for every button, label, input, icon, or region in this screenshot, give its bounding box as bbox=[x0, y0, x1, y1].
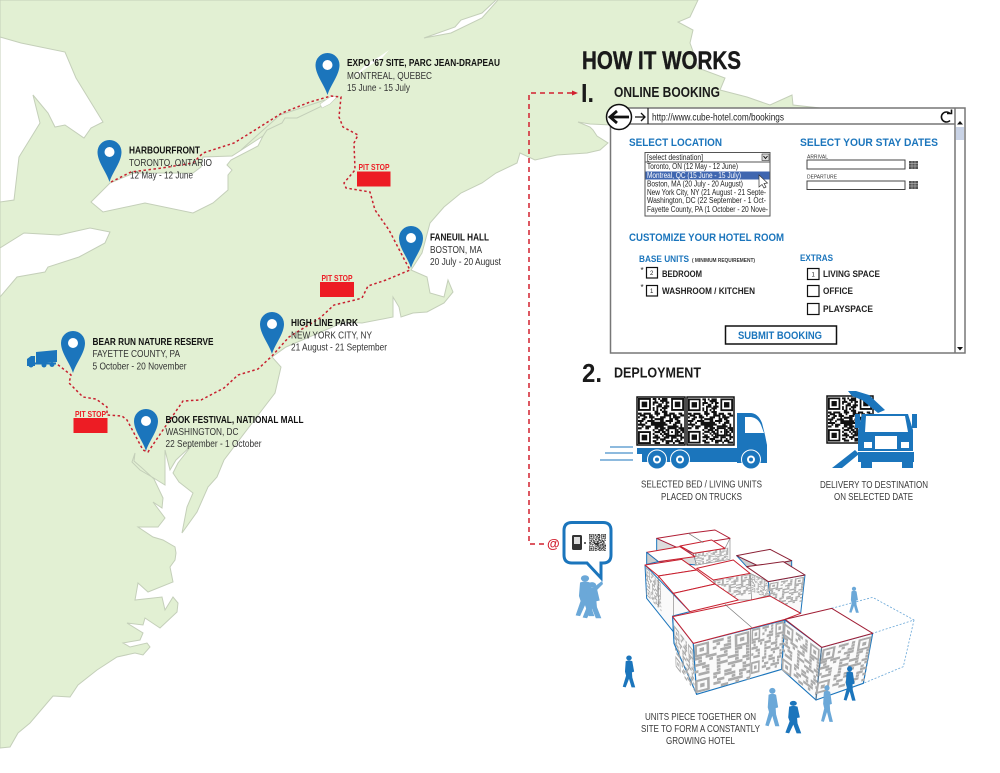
pit stop: north bbox=[357, 162, 390, 186]
speech bubble: phone and QR scan bbox=[564, 522, 611, 578]
dropdown list bbox=[645, 152, 770, 216]
pin: Book Festival bbox=[134, 409, 158, 451]
people around building bbox=[623, 587, 859, 733]
scrollbar bbox=[956, 121, 964, 350]
people scanning bbox=[576, 575, 603, 618]
label: High Line Park: HIGH LINE PARK bbox=[291, 317, 358, 329]
label: Faneuil Hall bbox=[430, 232, 501, 268]
base units options: WASHROOM / KITCHEN bbox=[662, 286, 755, 297]
middle units bbox=[697, 560, 807, 613]
heading: online booking: ONLINE BOOKING bbox=[614, 84, 720, 101]
base units options: 2 bbox=[650, 271, 654, 277]
pit stop: south: PIT STOP bbox=[75, 409, 106, 419]
caption: trucks bbox=[641, 480, 762, 503]
label: High Line Park bbox=[291, 317, 387, 354]
dropdown list: Toronto, ON (12 May - 12 June) bbox=[647, 162, 738, 171]
dropdown list: Montreal, QC (15 June - 15 July) bbox=[647, 171, 741, 180]
caption: units piece together bbox=[641, 712, 760, 747]
pin: Harbourfront bbox=[98, 140, 122, 182]
label: Bear Run: BEAR RUN NATURE RESERVE bbox=[92, 336, 214, 348]
caption: delivery: DELIVERY TO DESTINATION bbox=[820, 480, 928, 491]
pit stop: middle bbox=[320, 273, 354, 297]
dotted tour route bbox=[57, 96, 410, 452]
heading: select your stay dates: SELECT YOUR STAY DATES bbox=[800, 137, 938, 149]
extras options: LIVING SPACE bbox=[823, 269, 880, 280]
caption: units piece together: UNITS PIECE TOGETHER ON bbox=[645, 712, 756, 723]
icon: front view truck unloading QR unit bbox=[827, 391, 917, 468]
label: Faneuil Hall: 20 July - 20 August bbox=[430, 256, 501, 268]
map: northern river bbox=[424, 0, 498, 38]
base units options: * bbox=[640, 266, 644, 275]
base units options bbox=[639, 254, 755, 297]
map: St Lawrence river bbox=[241, 96, 338, 150]
submit button: SUBMIT BOOKING bbox=[738, 330, 822, 342]
label: Book Festival: WASHINGTON, DC bbox=[166, 426, 239, 438]
base units options: BASE UNITS bbox=[639, 254, 689, 265]
dropdown list: [select destination] bbox=[647, 153, 703, 162]
extras options: 1 bbox=[812, 272, 816, 278]
arrival and departure fields bbox=[807, 154, 918, 190]
extras options bbox=[800, 253, 880, 315]
pin: Bear Run bbox=[61, 331, 85, 373]
map: land mass bbox=[0, 0, 820, 748]
map: river sliver bbox=[350, 50, 389, 80]
pit stop: south bbox=[74, 409, 108, 433]
label: Bear Run bbox=[92, 336, 214, 372]
label: Expo 67 bbox=[347, 57, 500, 94]
map: Lake Huron bbox=[0, 37, 103, 202]
caption: trucks: PLACED ON TRUCKS bbox=[661, 492, 742, 503]
caption: units piece together: SITE TO FORM A CONSTANTLY bbox=[641, 724, 760, 735]
map: Lake Ontario bbox=[91, 136, 263, 213]
heading: deployment: DEPLOYMENT bbox=[614, 366, 701, 382]
pit stop: north: PIT STOP bbox=[358, 162, 390, 172]
panel: browser booking window bbox=[606, 104, 965, 353]
heading: customize your hotel room: CUSTOMIZE YOUR HOTEL ROOM bbox=[629, 232, 784, 244]
modular hotel building bbox=[623, 530, 914, 733]
left row of units bbox=[645, 559, 738, 632]
dropdown list: Washington, DC (22 September - 1 Oct- bbox=[647, 196, 766, 205]
icon: back button bbox=[606, 104, 632, 130]
dropdown list: New York City, NY (21 August - 21 Septe- bbox=[647, 188, 766, 197]
base units options: BEDROOM bbox=[662, 269, 702, 280]
dashed link from map to steps bbox=[529, 90, 578, 544]
icon: reload bbox=[941, 110, 952, 122]
icon: small truck bbox=[27, 350, 57, 368]
map: Lake Erie bbox=[0, 228, 110, 297]
dropdown list: Boston, MA (20 July - 20 August) bbox=[647, 180, 743, 188]
arrival and departure fields: ARRIVAL bbox=[807, 154, 828, 160]
extras options: PLAYSPACE bbox=[823, 304, 873, 315]
label: High Line Park: NEW YORK CITY, NY bbox=[291, 330, 372, 342]
icon: forward arrow bbox=[635, 113, 645, 121]
at symbol: @ bbox=[547, 536, 560, 551]
label: Harbourfront: 12 May - 12 June bbox=[130, 170, 193, 182]
label: Harbourfront: TORONTO, ONTARIO bbox=[129, 157, 212, 169]
caption: delivery bbox=[820, 480, 928, 503]
label: Book Festival: BOOK FESTIVAL, NATIONAL MALL bbox=[166, 414, 304, 426]
base units options: 1 bbox=[650, 289, 654, 295]
label: Book Festival: 22 September - 1 October bbox=[166, 438, 262, 450]
caption: units piece together: GROWING HOTEL bbox=[666, 736, 735, 747]
label: Harbourfront: HARBOURFRONT bbox=[129, 144, 200, 156]
pin: Expo 67 bbox=[316, 53, 340, 95]
dashed future unit bbox=[832, 597, 914, 683]
step number 1: I. bbox=[581, 78, 594, 108]
dropdown list: Fayette County, PA (1 October - 20 Nove- bbox=[647, 205, 768, 214]
url: http://www.cube-hotel.com/bookings bbox=[652, 112, 784, 124]
icon: side view truck with QR containers bbox=[600, 397, 767, 469]
label: Book Festival bbox=[166, 414, 304, 450]
front units bbox=[673, 596, 875, 700]
label: Bear Run: 5 October - 20 November bbox=[92, 360, 187, 372]
pin: Faneuil Hall bbox=[399, 226, 423, 268]
pit stop: middle: PIT STOP bbox=[322, 273, 353, 283]
step number 2: 2. bbox=[582, 358, 602, 388]
base units options: ( MINIMUM REQUIREMENT) bbox=[692, 258, 755, 264]
extras options: OFFICE bbox=[823, 286, 853, 297]
submit button bbox=[726, 326, 836, 344]
back units bbox=[647, 530, 792, 567]
label: High Line Park: 21 August - 21 September bbox=[291, 342, 387, 354]
label: Bear Run: FAYETTE COUNTY, PA bbox=[92, 348, 180, 360]
base units options: * bbox=[640, 283, 644, 292]
arrival and departure fields: DEPARTURE bbox=[807, 174, 838, 180]
caption: trucks: SELECTED BED / LIVING UNITS bbox=[641, 480, 762, 490]
label: Expo 67: EXPO '67 SITE, PARC JEAN-DRAPEAU bbox=[347, 57, 500, 69]
pin: High Line Park bbox=[260, 312, 284, 354]
label: Faneuil Hall: BOSTON, MA bbox=[430, 244, 482, 256]
label: Expo 67: MONTREAL, QUEBEC bbox=[347, 70, 432, 82]
title: HOW IT WORKS bbox=[582, 47, 741, 75]
label: Harbourfront bbox=[129, 144, 212, 182]
caption: delivery: ON SELECTED DATE bbox=[834, 492, 913, 503]
extras options: EXTRAS bbox=[800, 253, 833, 264]
label: Expo 67: 15 June - 15 July bbox=[347, 82, 411, 94]
label: Faneuil Hall: FANEUIL HALL bbox=[430, 232, 489, 244]
heading: select location: SELECT LOCATION bbox=[629, 137, 722, 149]
